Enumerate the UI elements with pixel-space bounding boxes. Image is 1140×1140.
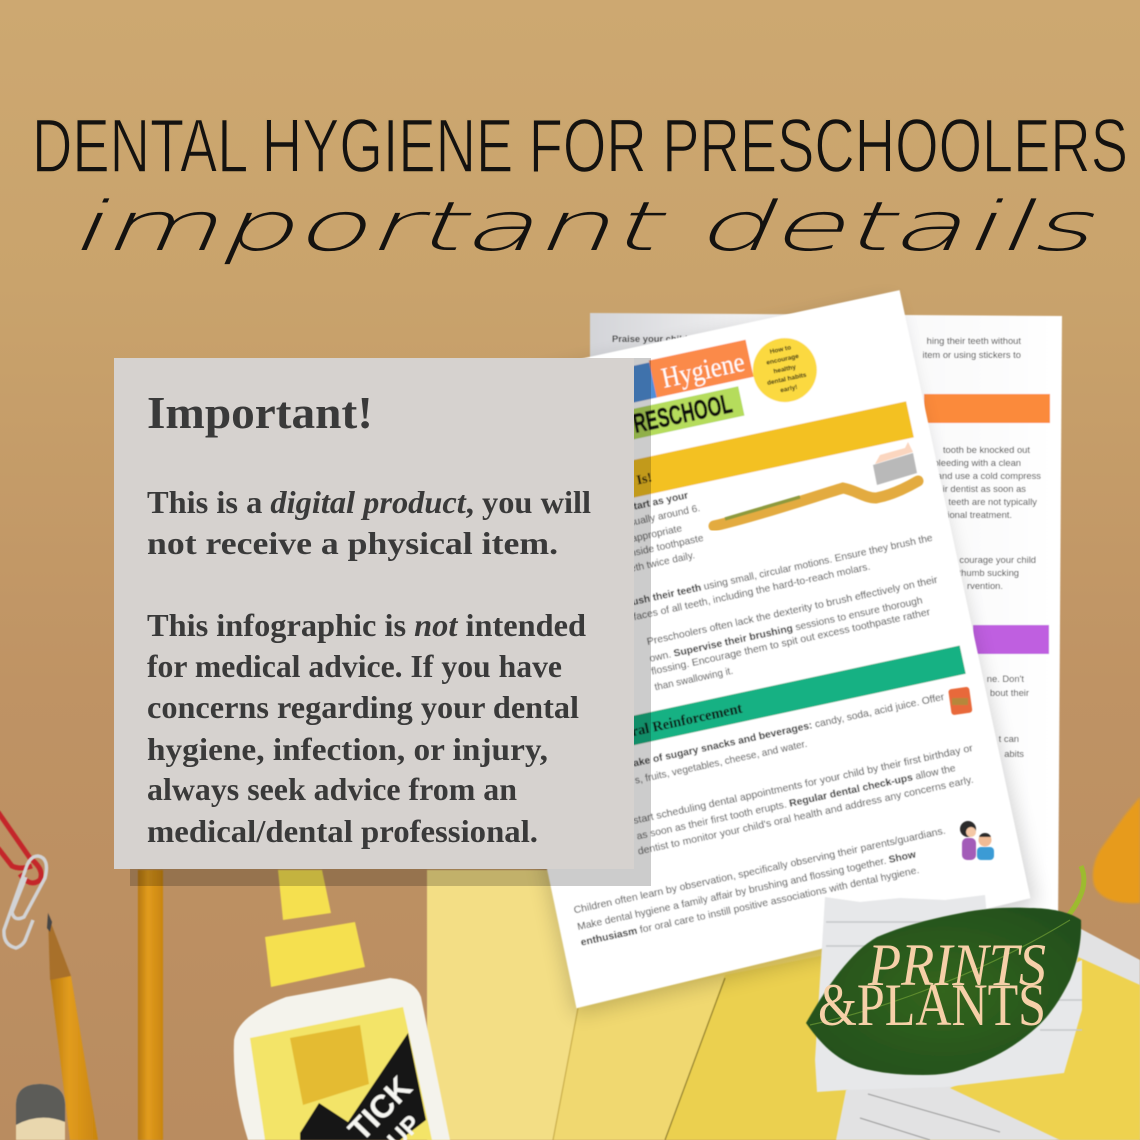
yellow section band <box>527 401 914 519</box>
back worksheet page <box>590 313 1062 930</box>
back worksheet page: courage your child <box>959 554 1036 565</box>
icon: snacks <box>948 687 973 715</box>
torn notepaper <box>815 895 1082 1092</box>
second paragraph: medical/dental professional. <box>147 813 538 849</box>
script subtitle: important details <box>68 188 1095 267</box>
toothbrushing text: flossing. Encourage them to spit out excess toothpaste rather <box>650 607 932 678</box>
paper clip: silver <box>4 856 46 948</box>
first paragraph <box>147 484 591 561</box>
front worksheet page: is Is! <box>623 471 654 491</box>
front worksheet page: Oral Reinforcement <box>619 701 744 743</box>
yellow paper folders <box>427 870 1056 1140</box>
toothbrushing text: than swallowing it. <box>654 666 734 693</box>
toothbrushing text: teeth twice daily. <box>621 550 696 577</box>
icon: parent and child <box>960 821 994 860</box>
reinforcement text: dentist to monitor your child's oral health and address any concerns early. <box>637 775 975 858</box>
pencil: center <box>138 870 163 1140</box>
reinforcement text <box>545 688 997 949</box>
paper clip: red <box>0 812 41 883</box>
first paragraph: This is a digital product, you will <box>147 484 591 520</box>
toothbrushing text: appropriate <box>630 523 683 545</box>
back worksheet page: Praise your child <box>612 333 688 344</box>
glue bottle <box>234 870 450 1140</box>
orange band <box>924 394 1050 423</box>
reinforcement text: ake of sugary snacks and beverages: candy, soda, acid juice. Offer <box>632 692 946 770</box>
reinforcement text: enthusiasm for oral care to instill positive associations with dental hygiene. <box>580 865 920 949</box>
yellow circle badge: early! <box>780 384 798 394</box>
pencil: sharpened left <box>47 913 98 1140</box>
back worksheet page: ne. Don't <box>987 673 1024 684</box>
yellow circle badge: healthy <box>773 364 797 375</box>
toothbrushing text: ush their teeth using small, circular motions. Ensure they brush the <box>631 533 934 608</box>
second paragraph: concerns regarding your dental <box>147 689 579 725</box>
white paper border, lower right <box>836 918 1140 1140</box>
back worksheet page: tooth be knocked out <box>943 444 1030 455</box>
yellow circle badge: dental habits <box>767 372 808 387</box>
yellow sheet, lower right <box>950 957 1140 1140</box>
logo wordmark: PRINTS <box>867 932 1046 998</box>
panel heading: Important! <box>147 387 373 438</box>
second paragraph: This infographic is not intended <box>147 607 586 643</box>
panel: important notice <box>114 358 634 869</box>
green section band <box>579 645 966 756</box>
back worksheet page: t can <box>999 733 1019 744</box>
back worksheet page: thumb sucking <box>959 567 1019 578</box>
reinforcement text: Children often learn by observation, specifically observing their parents/guardians. <box>573 826 947 916</box>
second paragraph <box>147 607 586 849</box>
back worksheet page: item or using stickers to <box>923 349 1021 360</box>
yellow circle badge: encourage <box>766 353 800 367</box>
icon: toothbrush <box>714 442 918 526</box>
back worksheet page: teeth are not typically <box>948 496 1037 507</box>
second paragraph: always seek advice from an <box>147 771 517 807</box>
first paragraph: not receive a physical item. <box>147 525 558 561</box>
toothbrushing text: faces of all teeth, including the hard-to-reach molars. <box>632 562 871 623</box>
leaf logo <box>806 866 1084 1075</box>
back worksheet page: bout their <box>990 687 1029 698</box>
header tag: blue <box>595 362 658 409</box>
back worksheet page: ir dentist as soon as <box>943 483 1026 494</box>
pencil eraser <box>16 1084 65 1140</box>
reinforcement text: s, fruits, vegetables, cheese, and water. <box>634 739 808 787</box>
back worksheet page: and use a cold compress <box>937 470 1041 481</box>
front sheet shadow <box>445 300 1036 1015</box>
toothbrushing text <box>608 442 953 695</box>
toothbrushing text: Preschoolers often lack the dexterity to brush effectively on their <box>646 575 939 648</box>
toothbrushing text: inside toothpaste <box>627 533 705 560</box>
header tag: Hygiene: Hygiene <box>659 347 747 395</box>
leaf logo: &PLANTS <box>818 972 1046 1038</box>
toothbrushing text: usually around 6. <box>623 503 701 530</box>
back worksheet page: tional treatment. <box>945 509 1012 520</box>
second paragraph: for medical advice. If you have <box>147 648 562 684</box>
yellow circle badge <box>747 332 823 408</box>
back worksheet page: abits <box>1004 748 1024 759</box>
reinforcement text: start scheduling dental appointments for your child by their first birthday or <box>632 743 974 827</box>
front worksheet page <box>443 290 1033 1008</box>
white note lines, lower right <box>860 1094 1000 1140</box>
reinforcement text: Make dental hygiene a family affair by brushing and flossing together. Show <box>576 849 917 933</box>
header tag: PRESCHOOL: PRESCHOOL <box>619 388 735 441</box>
panel shadow <box>130 358 651 886</box>
toothbrushing text: Start as your <box>626 490 689 514</box>
toothbrushing text: own. Supervise their brushing sessions to ensure thorough <box>649 595 924 665</box>
back worksheet page: rvention. <box>967 580 1003 591</box>
reinforcement text: as soon as their first tooth erupts. Regular dental check-ups allow the <box>636 763 957 843</box>
purple band <box>973 625 1049 654</box>
second paragraph: hygiene, infection, or injury, <box>147 731 548 767</box>
header tag: PRESCHOOL <box>575 386 745 451</box>
orange eraser right <box>1093 797 1140 903</box>
back worksheet page: hing their teeth without <box>927 335 1021 346</box>
yellow circle badge: How to <box>769 344 792 356</box>
back worksheet page: bleeding with a clean <box>933 457 1021 468</box>
